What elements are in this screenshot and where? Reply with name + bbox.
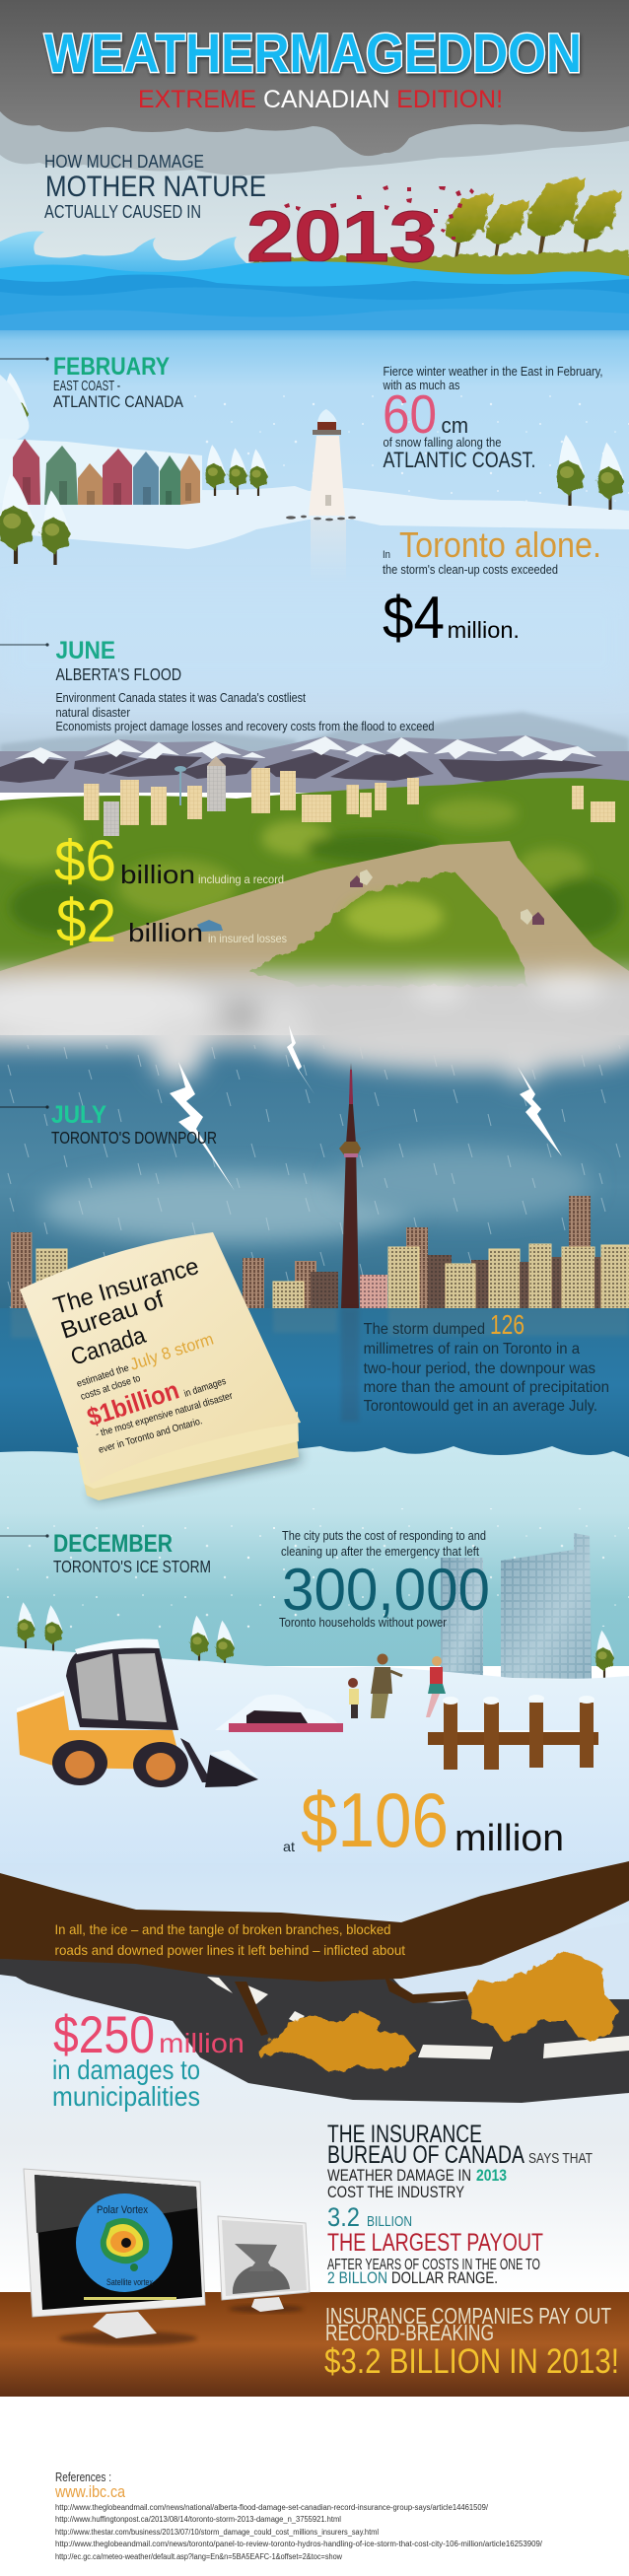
Toronto skyline xyxy=(11,1196,629,1308)
text: inflicted about: In all, the ice – and the tangle of broken branches, blocked xyxy=(55,1921,390,1937)
document text: - the most expensive natural disaster xyxy=(95,1390,235,1440)
text: Insurance Bureau statement: THE INSURANCE xyxy=(327,2121,482,2148)
text: 126 millimetres of rain: 126 xyxy=(490,1309,524,1340)
skyline reflection xyxy=(11,1308,629,1422)
wooden fence xyxy=(428,1695,598,1770)
document text: July 8 storm xyxy=(127,1330,216,1374)
text: costliest natural disaster: natural disaster xyxy=(55,706,130,720)
fog clouds xyxy=(0,970,629,1083)
closing statement xyxy=(324,2303,619,2381)
back waves with crests xyxy=(0,231,246,291)
heading: June: ALBERTA'S FLOOD xyxy=(55,664,181,684)
text: six billion damage xyxy=(54,829,284,893)
intro text: MOTHER NATURE xyxy=(45,171,266,203)
lightning bolts xyxy=(170,1025,562,1191)
distant snow trees xyxy=(17,1602,614,1678)
text: Insurance Bureau statement: BILLION xyxy=(367,2213,412,2230)
document text: Canada xyxy=(68,1322,150,1371)
lower sky xyxy=(0,1863,629,2292)
text: 250 million damages: municipalities xyxy=(52,2081,200,2112)
text: 300,000 households: 300,000 xyxy=(282,1557,490,1623)
intro text xyxy=(44,151,266,222)
text: Toronto clean-up cost: million. xyxy=(448,617,520,643)
text: costliest natural disaster: Environment Canada states it was Canada's costliest xyxy=(55,691,306,705)
snowy ground and frozen water xyxy=(0,486,629,690)
buried car xyxy=(215,1695,343,1732)
text: Toronto clean-up cost: In xyxy=(383,549,390,561)
text: Toronto clean-up cost: Toronto alone. xyxy=(399,524,601,565)
text: Toronto clean-up cost xyxy=(383,524,601,651)
water bands xyxy=(0,261,629,330)
text: Insurance Bureau statement: 2 BILLON xyxy=(327,2268,387,2287)
closing statement: RECORD-BREAKING xyxy=(325,2320,494,2345)
text: Insurance Bureau statement: WEATHER DAMAGE IN xyxy=(327,2166,471,2185)
document text: $1billion xyxy=(84,1375,182,1432)
heading: July: JULY xyxy=(51,1101,106,1129)
Calgary skyline xyxy=(84,756,615,836)
text: 126 millimetres of rain: millimetres of rain on Toronto in a xyxy=(364,1341,580,1358)
text: two billion insured: in insured losses xyxy=(208,932,287,945)
text: 106 million cost: at xyxy=(283,1839,295,1854)
heading: February: EAST COAST - xyxy=(53,378,120,394)
timeline marker: December xyxy=(0,1534,49,1538)
heading: December xyxy=(53,1530,211,1576)
grass strip xyxy=(246,250,629,281)
text: sixty centimetres of snow: with as much as xyxy=(383,379,459,392)
text: 106 million cost xyxy=(283,1776,564,1863)
text: sixty centimetres of snow: Fierce winter weather in the East in February, xyxy=(383,365,603,379)
document text: estimated the xyxy=(76,1362,131,1390)
subtitle: EXTREME CANADIAN EDITION! xyxy=(138,86,503,113)
text: Insurance Bureau statement: SAYS THAT xyxy=(528,2150,593,2167)
text: six billion damage: billion xyxy=(120,860,195,889)
flood water xyxy=(0,1308,629,1461)
document text: ever in Toronto and Ontario. xyxy=(98,1416,204,1456)
text: 106 million cost: $106 xyxy=(301,1776,449,1863)
text: sixty centimetres of snow: ATLANTIC COAST. xyxy=(383,448,536,472)
text: inflicted about xyxy=(55,1921,405,1958)
text: 250 million damages xyxy=(52,2006,245,2112)
text: 126 millimetres of rain: more than the amount of precipitation xyxy=(364,1379,609,1396)
text: two billion insured: $2 xyxy=(56,887,116,954)
text: 106 million cost: million xyxy=(454,1818,564,1859)
light storm cloud layer xyxy=(0,99,629,175)
heading: December: TORONTO'S ICE STORM xyxy=(53,1557,211,1576)
references xyxy=(54,2470,543,2561)
mountains xyxy=(0,712,629,793)
text: inflicted about: roads and downed power lines it left behind – inflicted about xyxy=(55,1942,405,1958)
foreground snow trees xyxy=(0,435,624,565)
document: Insurance Bureau xyxy=(20,1232,301,1500)
year 2013: 2013 xyxy=(246,197,437,277)
text: 126 millimetres of rain: Torontowould get in an average July. xyxy=(364,1398,597,1415)
heading: February: FEBRUARY xyxy=(53,353,170,381)
document text: in damages xyxy=(183,1376,228,1400)
text: Insurance Bureau statement xyxy=(327,2121,593,2287)
text: 126 millimetres of rain xyxy=(364,1309,609,1415)
text: 300,000 households: cleaning up after the emergency that left xyxy=(281,1545,479,1559)
text: six billion damage: including a record xyxy=(198,872,284,886)
document text xyxy=(50,1253,235,1456)
lighthouse xyxy=(286,409,356,583)
timeline marker: July xyxy=(0,1105,49,1109)
label: Satellite vortex: Satellite vortex xyxy=(106,2277,153,2287)
text: sixty centimetres of snow: 60 xyxy=(383,383,437,445)
text: Insurance Bureau statement: THE LARGEST PAYOUT xyxy=(327,2229,543,2257)
green land xyxy=(0,778,629,996)
references: http://www.huffingtonpost.ca/2013/08/14/toronto-storm-2013-damage_n_3755921.html xyxy=(55,2515,341,2524)
green island xyxy=(248,870,527,986)
document text: costs at close to xyxy=(80,1373,142,1403)
timeline marker: February xyxy=(0,357,49,361)
heading: July: TORONTO'S DOWNPOUR xyxy=(51,1128,217,1148)
orange foliage cluster two xyxy=(468,1950,619,2043)
flooded road xyxy=(0,841,629,996)
text: 300,000 households: Toronto households without power xyxy=(279,1616,447,1630)
text: costliest natural disaster: Economists project damage losses and recovery costs from the flood to exceed xyxy=(55,720,435,733)
text: Insurance Bureau statement: COST THE INDUSTRY xyxy=(327,2183,464,2201)
text: two billion insured xyxy=(56,887,287,954)
label: Polar Vortex: Polar Vortex xyxy=(97,2204,148,2216)
small monitor xyxy=(218,2216,310,2313)
row of snow covered houses xyxy=(0,439,202,505)
rain xyxy=(0,1045,629,1308)
heading: February: ATLANTIC CANADA xyxy=(53,392,184,411)
text: sixty centimetres of snow xyxy=(383,365,603,472)
text: 300,000 households xyxy=(279,1529,490,1630)
wind-blown trees xyxy=(446,175,621,259)
storm sky xyxy=(0,1035,629,1311)
document text: The Insurance xyxy=(50,1253,202,1320)
document text: Bureau of xyxy=(58,1287,168,1345)
intro text: ACTUALLY CAUSED IN xyxy=(44,201,201,222)
text: Insurance Bureau statement: 2013 xyxy=(476,2166,507,2185)
text: 250 million damages: $250 xyxy=(53,2006,155,2064)
text: Insurance Bureau statement: 3.2 xyxy=(327,2202,360,2232)
CN Tower xyxy=(339,1063,361,1308)
road markings xyxy=(207,1977,629,2059)
snow section background xyxy=(0,1446,629,1666)
text: sixty centimetres of snow: of snow falling along the xyxy=(383,436,502,450)
snowfall xyxy=(187,394,629,503)
family walking xyxy=(348,1654,446,1718)
references: References : xyxy=(55,2470,111,2484)
flooded houses and car xyxy=(197,870,544,932)
text: two billion insured: billion xyxy=(128,918,203,947)
heading: February xyxy=(53,353,184,411)
orange foliage cluster one xyxy=(258,2011,416,2073)
snowfall right xyxy=(237,1508,629,1627)
road right edge xyxy=(394,1999,629,2100)
text: Insurance Bureau statement: AFTER YEARS OF COSTS IN THE ONE TO xyxy=(327,2257,540,2273)
heading: June xyxy=(55,637,181,684)
snowy road xyxy=(0,1959,629,2103)
header dark cloud xyxy=(0,0,629,156)
references: http://ec.gc.ca/meteo-weather/default.asp?lang=En&n=5BA5EAFC-1&offset=2&toc=show xyxy=(55,2552,342,2561)
text: sixty centimetres of snow: cm xyxy=(442,413,468,438)
background: lower header sky xyxy=(0,108,629,306)
text: 300,000 households: The city puts the cost of responding to and xyxy=(282,1529,486,1543)
snow loader xyxy=(17,1638,258,1787)
text: Toronto clean-up cost: $4 xyxy=(383,585,445,651)
large monitor xyxy=(24,2169,205,2345)
snow tree cluster left xyxy=(0,373,29,444)
heading: June: JUNE xyxy=(55,637,115,664)
references: http://www.thestar.com/business/2013/07/10/storm_damage_could_cost_millions_insurers_say.html xyxy=(55,2528,379,2537)
heading: July xyxy=(51,1101,217,1148)
text: Toronto clean-up cost: the storm's clean-up costs exceeded xyxy=(383,563,558,577)
text: Insurance Bureau statement: DOLLAR RANGE. xyxy=(391,2268,498,2287)
gap in the branch xyxy=(389,1922,629,2003)
snowfall xyxy=(0,1518,296,1636)
text: six billion damage: $6 xyxy=(54,829,116,893)
text: 126 millimetres of rain: The storm dumped xyxy=(364,1321,485,1338)
intro text: HOW MUCH DAMAGE xyxy=(44,151,204,172)
fallen branch xyxy=(0,1861,629,2036)
timeline marker: June xyxy=(0,643,49,647)
references: www.ibc.ca xyxy=(54,2482,125,2501)
text: 250 million damages: million xyxy=(159,2028,245,2058)
text: costliest natural disaster xyxy=(55,691,435,733)
glass towers xyxy=(441,1533,592,1679)
flying red fragments xyxy=(284,185,474,240)
text: 250 million damages: in damages to xyxy=(52,2054,200,2085)
references: http://www.theglobeandmail.com/news/national/alberta-flood-damage-set-canadian-record-insurance-group-says/article14461509/ xyxy=(55,2503,489,2512)
heading: December: DECEMBER xyxy=(53,1530,173,1558)
text: 126 millimetres of rain: two-hour period, the downpour was xyxy=(364,1360,595,1377)
snowfield xyxy=(0,1646,629,1873)
text: Insurance Bureau statement: BUREAU OF CANADA xyxy=(327,2141,524,2169)
sky over winter section xyxy=(0,317,629,781)
brown desk xyxy=(0,2292,629,2397)
references: http://www.theglobeandmail.com/news/toronto/panel-to-review-toronto-hydros-handling-of-ice-storm-that-cost-city-106-million/article16253909/ xyxy=(55,2540,543,2548)
